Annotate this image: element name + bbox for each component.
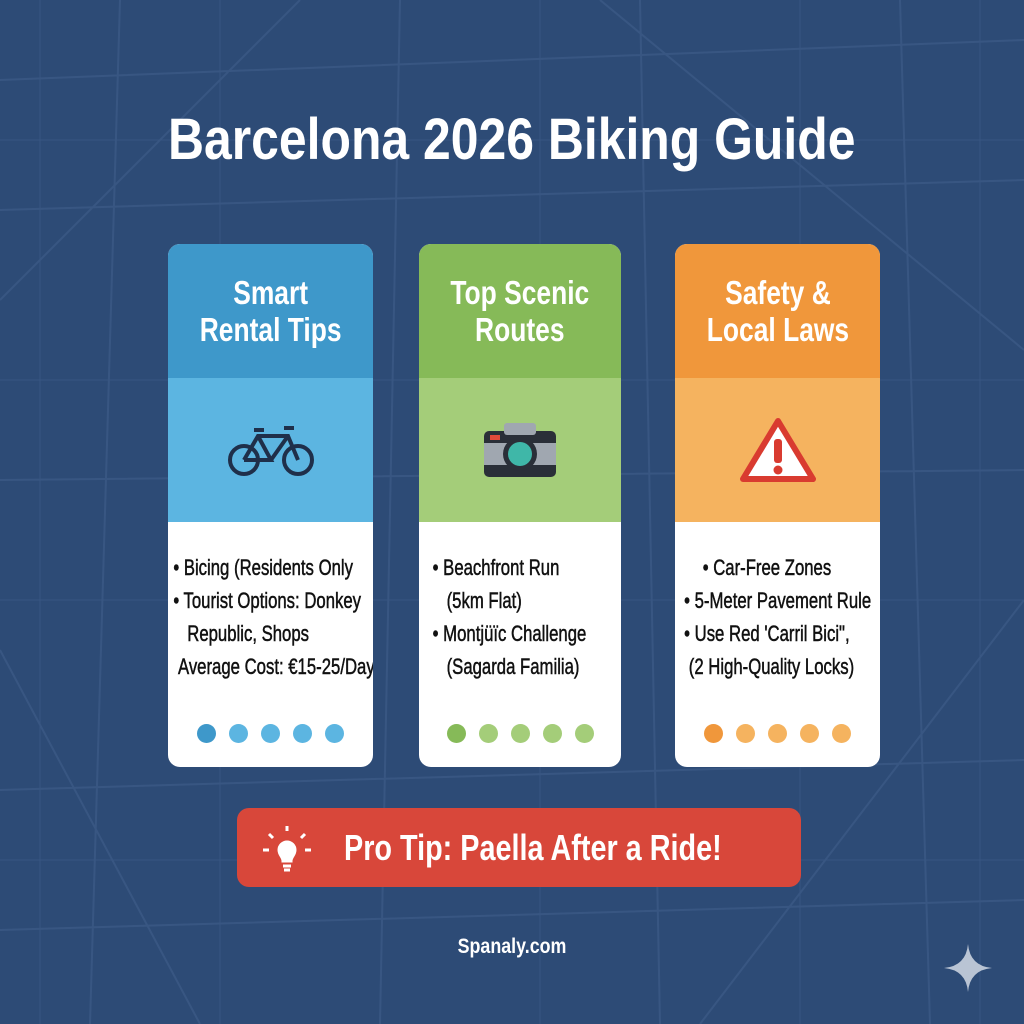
panel: scenic routes [419,244,621,767]
text: • Car-Free Zones [703,555,831,580]
panel: safety [675,244,880,767]
icon: lightbulb [263,826,311,872]
icon: bicycle [168,378,373,522]
footer: Spanaly.com [458,935,566,958]
text [173,555,373,679]
text: • Bicing (Residents Only [173,555,353,580]
heading: Routes [475,311,565,348]
heading: Local Laws [706,311,849,348]
dots [704,724,851,743]
icon: sparkle [944,944,992,992]
heading [675,244,880,378]
dots [197,724,344,743]
text: • Beachfront Run [433,555,559,580]
panel: rental tips [168,244,373,767]
text: (Sagarda Familia) [447,654,580,679]
text: Republic, Shops [187,621,309,646]
text: (2 High-Quality Locks) [689,654,854,679]
text: • Use Red 'Carril Bici", [684,621,850,646]
text: • Tourist Options: Donkey [173,588,361,613]
heading [168,244,373,378]
icon: camera [419,378,621,522]
heading: Safety & [725,274,830,311]
dots [447,724,594,743]
text: (5km Flat) [447,588,522,613]
callout: pro tip [237,808,801,887]
text: • 5-Meter Pavement Rule [684,588,871,613]
icon: warning [675,378,880,522]
title: Barcelona 2026 Biking Guide [168,107,856,172]
text [433,555,586,679]
heading: Top Scenic [451,274,589,311]
heading: Smart [233,274,308,311]
heading [419,244,621,378]
text: • Montjüïc Challenge [433,621,586,646]
text [684,555,871,679]
text: Pro Tip: Paella After a Ride! [344,827,722,868]
heading: Rental Tips [200,311,341,348]
text: Average Cost: €15-25/Day [178,654,373,679]
